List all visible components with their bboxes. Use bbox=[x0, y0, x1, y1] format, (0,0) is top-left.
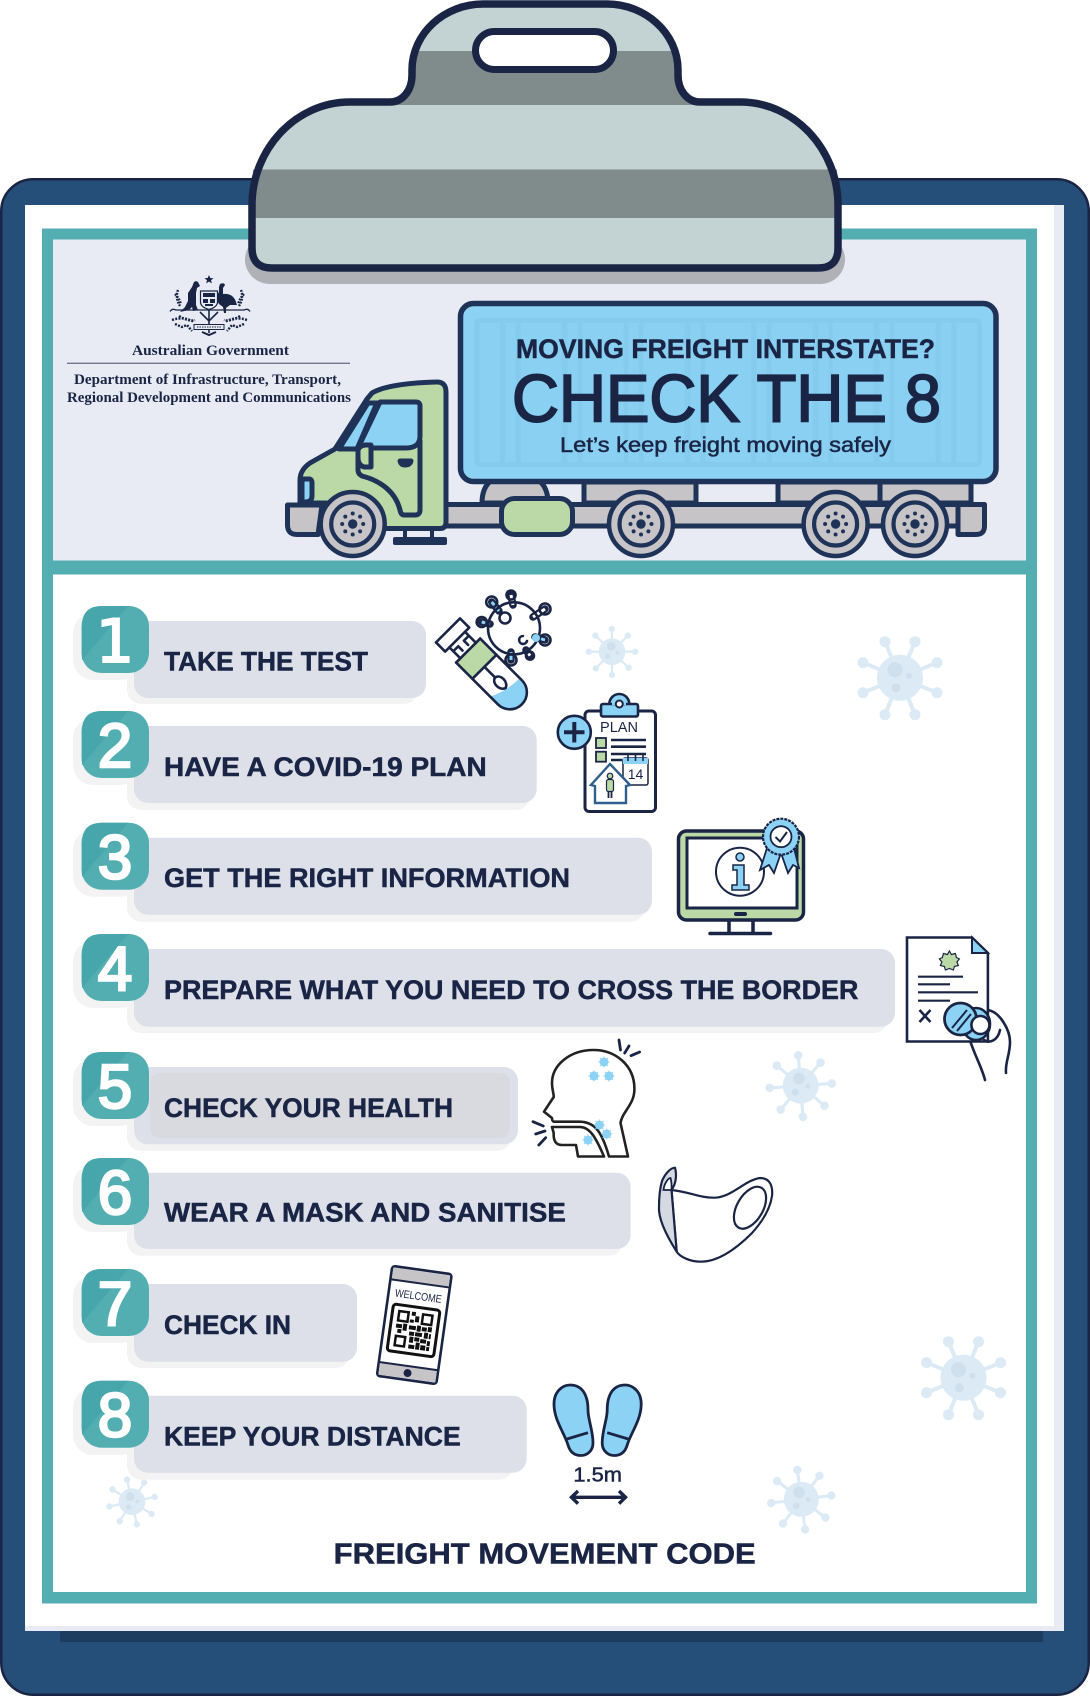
wheels bbox=[321, 492, 947, 556]
clip bbox=[252, 4, 838, 268]
step 1: 1 bbox=[96, 607, 134, 677]
board shadow under paper bbox=[60, 1631, 1043, 1642]
government logo: Australian Government bbox=[132, 343, 289, 359]
step 8: 8 bbox=[98, 1382, 132, 1451]
step 2: HAVE A COVID-19 PLAN bbox=[164, 752, 487, 782]
step 5: 5 bbox=[98, 1053, 132, 1122]
clip shadow bbox=[245, 235, 845, 284]
icon: footprints 1.5m: 1.5m bbox=[573, 1465, 622, 1487]
step 2: 2 bbox=[98, 712, 132, 781]
step 3: GET THE RIGHT INFORMATION bbox=[164, 863, 570, 893]
icon: monitor with info and rosette bbox=[678, 819, 804, 934]
icon: head with virus in throat bbox=[533, 1040, 640, 1156]
icon: phone with QR code bbox=[377, 1266, 452, 1384]
icon: phone with QR code: WELCOME bbox=[394, 1288, 442, 1306]
truck cab bbox=[300, 382, 446, 528]
step 7: 7 bbox=[98, 1270, 132, 1339]
step 4 bbox=[73, 934, 895, 1033]
heading: moving freight interstate: MOVING FREIGHT INTERSTATE? bbox=[516, 334, 935, 364]
step 6: 6 bbox=[98, 1159, 132, 1228]
truck chassis bbox=[288, 474, 984, 545]
icon: plan clipboard: PLAN bbox=[600, 719, 638, 736]
icon: face mask bbox=[659, 1168, 773, 1262]
step 3: 3 bbox=[98, 824, 132, 893]
footer title: FREIGHT MOVEMENT CODE bbox=[334, 1538, 756, 1570]
icon: signed document and hand bbox=[907, 938, 1010, 1080]
step 4: PREPARE WHAT YOU NEED TO CROSS THE BORDER bbox=[164, 975, 858, 1005]
step 3 bbox=[73, 823, 652, 922]
subheading: Let’s keep freight moving safely bbox=[560, 434, 892, 457]
icon: footprints 1.5m bbox=[554, 1385, 641, 1504]
step 1 bbox=[73, 606, 426, 704]
truck container bbox=[460, 304, 996, 482]
teal frame bbox=[42, 228, 1037, 1604]
step 4: 4 bbox=[98, 935, 132, 1004]
step 8: KEEP YOUR DISTANCE bbox=[164, 1422, 461, 1452]
icon: test tube and virus bbox=[436, 590, 550, 716]
header panel bbox=[53, 240, 1026, 560]
step 6: WEAR A MASK AND SANITISE bbox=[164, 1198, 566, 1228]
background viruses bbox=[103, 620, 1006, 1539]
coat of arms bbox=[170, 275, 250, 335]
icon: plan clipboard bbox=[558, 694, 656, 812]
government logo: Regional Development and Communications bbox=[67, 390, 351, 406]
step 5 bbox=[73, 1052, 518, 1151]
step 7: CHECK IN bbox=[164, 1310, 291, 1340]
truck bbox=[288, 304, 996, 556]
step 1: TAKE THE TEST bbox=[164, 646, 368, 676]
government logo bbox=[67, 275, 351, 406]
step 5: CHECK YOUR HEALTH bbox=[164, 1093, 453, 1123]
step 8 bbox=[73, 1381, 527, 1480]
step 2 bbox=[73, 711, 537, 810]
content panel bbox=[53, 574, 1026, 1592]
fuel tank bbox=[502, 498, 572, 534]
heading: check the 8: CHECK THE 8 bbox=[512, 362, 941, 436]
step 7 bbox=[73, 1269, 357, 1368]
step 6 bbox=[73, 1158, 631, 1256]
government logo: Department of Infrastructure, Transport, bbox=[74, 372, 341, 388]
icon: plan clipboard: 14 bbox=[628, 766, 643, 782]
